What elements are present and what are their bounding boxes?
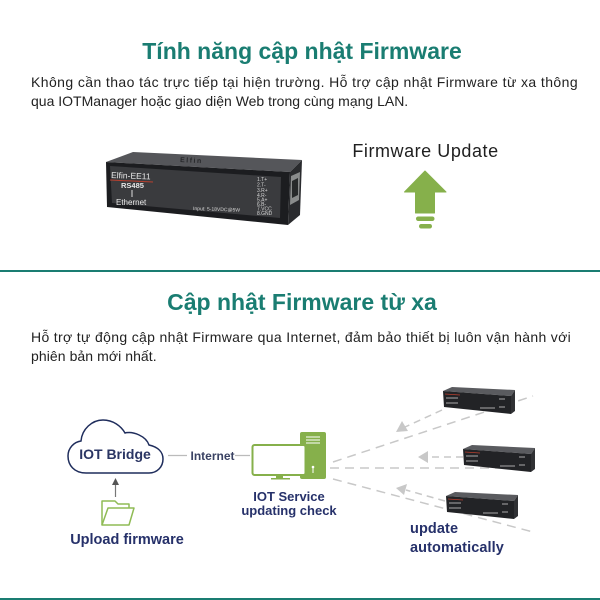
device photo: Elfin-EE11: 4.R- bbox=[257, 193, 267, 199]
device: bottom bbox=[446, 492, 518, 519]
icon: computer server bbox=[252, 432, 326, 480]
device photo: Elfin-EE11: Ethernet bbox=[116, 198, 147, 207]
device photo: Elfin-EE11: RS485 bbox=[121, 181, 144, 190]
device photo: Elfin-EE11: 6.B- bbox=[257, 202, 267, 208]
title: firmware feature: Tính năng cập nhật Firmware bbox=[142, 38, 462, 64]
device: top bbox=[443, 387, 515, 414]
label: Upload firmware: Upload firmware bbox=[70, 532, 184, 548]
text: remote update description: Hỗ trợ tự động cập nhật Firmware qua Internet, đảm bảo thiết bị luôn vận hành với bbox=[31, 329, 571, 345]
icon: folder bbox=[102, 501, 134, 525]
dashed update lines bbox=[330, 396, 538, 532]
label: update automatically: update bbox=[410, 521, 458, 537]
device photo: Elfin-EE11: 3.R+ bbox=[257, 188, 268, 194]
arrows: return to service bbox=[396, 410, 463, 501]
device: middle bbox=[463, 445, 535, 472]
device photo: Elfin-EE11: Elfin bbox=[180, 157, 203, 165]
label: updating check: updating check bbox=[241, 503, 337, 518]
device photo: Elfin-EE11: 7.VCC bbox=[257, 206, 272, 212]
device photo: Elfin-EE11: 5.A+ bbox=[257, 198, 268, 204]
icon: IOT Bridge cloud bbox=[68, 420, 163, 473]
device photo: Elfin-EE11: 2.T- bbox=[257, 182, 266, 188]
text: remote update description bbox=[31, 329, 571, 364]
label: Firmware Update: Firmware Update bbox=[352, 141, 499, 161]
label: IOT Service: IOT Service bbox=[253, 489, 325, 504]
text: feature description: qua IOTManager hoặc giao diện Web trong cùng mạng LAN. bbox=[31, 93, 408, 109]
device photo: Elfin-EE11: Elfin-EE11 bbox=[111, 170, 151, 181]
label: update automatically bbox=[410, 521, 504, 556]
text: remote update description: phiên bản mới nhất. bbox=[31, 348, 157, 364]
device photo: Elfin-EE11: 8.GND bbox=[257, 211, 273, 217]
connector: Internet: Internet bbox=[190, 449, 235, 463]
label: update automatically: automatically bbox=[410, 540, 504, 556]
device photo: Elfin-EE11: Input: 5-18VDC@5W bbox=[193, 206, 240, 214]
arrow: upload to cloud bbox=[112, 478, 119, 497]
icon: IOT Bridge cloud: IOT Bridge bbox=[79, 446, 151, 462]
text: feature description bbox=[31, 74, 578, 109]
icon: green up arrow bbox=[404, 171, 446, 228]
connector: Internet bbox=[168, 449, 250, 463]
title: remote firmware update: Cập nhật Firmware từ xa bbox=[167, 289, 437, 315]
text: feature description: Không cần thao tác trực tiếp tại hiện trường. Hỗ trợ cập nhật Firmware từ xa thông bbox=[31, 74, 578, 90]
device photo: Elfin-EE11: 1.T+ bbox=[257, 177, 267, 183]
device photo: Elfin-EE11 bbox=[106, 152, 302, 225]
